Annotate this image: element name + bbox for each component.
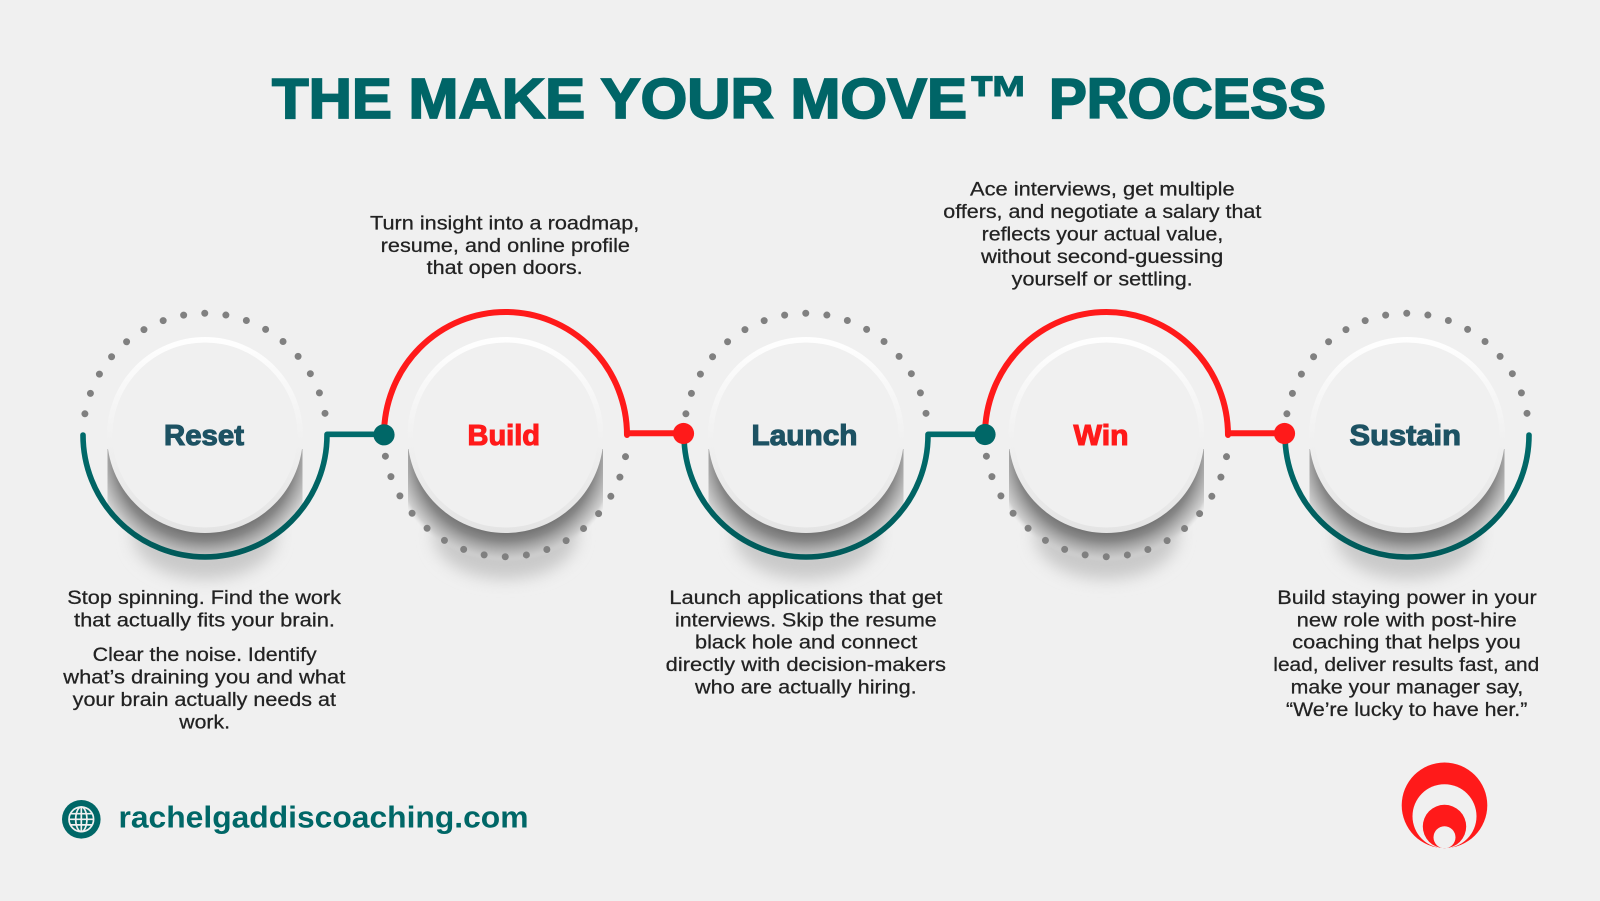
text block: Reset description bbox=[62, 588, 346, 733]
text block: Sustain description: lead, deliver results fast, and bbox=[1273, 655, 1539, 676]
label: Sustain: Sustain bbox=[1350, 420, 1461, 452]
disc: Reset bbox=[107, 337, 303, 533]
red arc and connector: Build bbox=[384, 312, 683, 435]
teal arc: Sustain bbox=[1285, 435, 1529, 557]
disc: Sustain bbox=[1309, 337, 1505, 533]
title bbox=[272, 64, 1326, 133]
dotted arc: Reset bbox=[85, 313, 325, 414]
text block: Win description bbox=[943, 180, 1262, 290]
text block: Win description: reflects your actual value, bbox=[982, 225, 1223, 246]
disc: Launch bbox=[708, 337, 904, 533]
text block: Launch description: Launch applications that get bbox=[669, 588, 943, 609]
dotted arc: Win bbox=[986, 456, 1227, 557]
text block: Reset description: that actually fits your brain. bbox=[74, 610, 335, 631]
label: Build: Build bbox=[468, 420, 540, 452]
text block: Sustain description bbox=[1273, 588, 1539, 721]
text block: Launch description: black hole and connect bbox=[695, 633, 918, 654]
text block: Build description bbox=[370, 214, 639, 279]
dotted arc: Launch bbox=[686, 313, 926, 414]
text block: Win description: yourself or settling. bbox=[1012, 269, 1193, 290]
step: Launch bbox=[684, 313, 985, 585]
text block: Reset description: Stop spinning. Find the work bbox=[67, 588, 342, 609]
dotted arc: Sustain bbox=[1287, 313, 1527, 414]
text block: Build description: resume, and online profile bbox=[381, 236, 630, 257]
node: red Build to Launch bbox=[673, 423, 694, 444]
text block: Launch description: who are actually hiring. bbox=[694, 678, 917, 699]
disc shadow: Sustain bbox=[1310, 449, 1504, 585]
disc: Win bbox=[1008, 337, 1204, 533]
text block: Build description: Turn insight into a roadmap, bbox=[370, 214, 639, 235]
text block: Win description: without second-guessing bbox=[980, 247, 1223, 268]
text block: Launch description: directly with decision-makers bbox=[666, 655, 946, 676]
teal arc and connector: Launch bbox=[684, 434, 985, 557]
disc: Build bbox=[408, 337, 604, 533]
node: teal Launch to Win bbox=[974, 424, 996, 445]
text block: Reset description: work. bbox=[178, 712, 230, 733]
text block: Sustain description: new role with post-hire bbox=[1297, 610, 1517, 631]
text block: Win description: offers, and negotiate a salary that bbox=[943, 202, 1262, 223]
red arc and connector: Win bbox=[985, 312, 1284, 435]
text block: Sustain description: make your manager say, bbox=[1291, 678, 1523, 699]
label: Reset: Reset bbox=[164, 420, 244, 452]
logo bbox=[1402, 762, 1487, 848]
dotted arc: Build bbox=[385, 456, 626, 557]
label: Win: Win bbox=[1074, 420, 1128, 452]
node: teal Reset to Build bbox=[373, 424, 395, 445]
text block: Reset description: your brain actually needs at bbox=[73, 690, 337, 711]
text block: Build description: that open doors. bbox=[427, 258, 583, 279]
title: ™ bbox=[968, 64, 1030, 133]
text block: Sustain description: coaching that helps you bbox=[1292, 633, 1521, 654]
disc shadow: Build bbox=[408, 449, 603, 585]
disc shadow: Reset bbox=[108, 449, 302, 585]
text block: Sustain description: Build staying power in your bbox=[1277, 588, 1537, 609]
title: THE MAKE YOUR MOVE bbox=[272, 67, 967, 130]
website url: rachelgaddiscoaching.com bbox=[118, 800, 528, 835]
icon: globe bbox=[62, 800, 101, 839]
disc shadow: Launch bbox=[708, 449, 904, 585]
text block: Reset description: what’s draining you and what bbox=[62, 668, 346, 689]
text block: Launch description bbox=[666, 588, 946, 699]
text block: Sustain description: “We’re lucky to have her.” bbox=[1286, 700, 1527, 721]
text block: Win description: Ace interviews, get multiple bbox=[970, 180, 1235, 201]
title: PROCESS bbox=[1049, 67, 1326, 130]
step: Build bbox=[384, 312, 683, 585]
node: red Win to Sustain bbox=[1274, 423, 1295, 444]
disc shadow: Win bbox=[1009, 449, 1204, 585]
text block: Launch description: interviews. Skip the resume bbox=[675, 610, 937, 631]
teal arc and connector: Reset bbox=[83, 434, 384, 557]
text block: Reset description: Clear the noise. Identify bbox=[93, 645, 317, 666]
step: Reset bbox=[83, 313, 384, 585]
label: Launch: Launch bbox=[752, 420, 858, 452]
step: Win bbox=[985, 312, 1284, 585]
step: Sustain bbox=[1285, 313, 1529, 585]
